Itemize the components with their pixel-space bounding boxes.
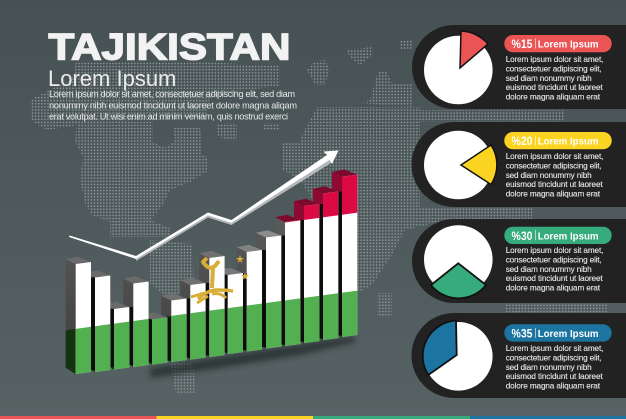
description text: euismod tincidunt ut laoreet (506, 180, 603, 189)
label pill: %15 (512, 39, 533, 51)
description text (506, 152, 603, 199)
description text: consectetuer adipiscing elit, (506, 255, 602, 264)
panel background (412, 25, 626, 109)
description text: dolore magna aliquam erat (506, 284, 601, 293)
panel: 20 percent (412, 122, 626, 207)
title: TAJIKISTAN (48, 26, 290, 68)
bottom colour strip (0, 416, 626, 419)
panel background (412, 219, 626, 303)
intro text block: nonummy nibh euismod tincidunt ut laoreet dolore magna aliqam (49, 100, 297, 110)
label pill: %30 (512, 231, 532, 243)
label pill: Lorem Ipsum (538, 40, 599, 51)
panel background (412, 313, 626, 398)
pie chart 30 percent (424, 225, 493, 298)
pie chart 35 percent (423, 320, 493, 391)
label pill (504, 324, 612, 342)
panel: 30 percent (412, 219, 626, 303)
label pill: Lorem Ipsum (538, 137, 599, 148)
description text (506, 246, 603, 293)
intro text block: Lorem ipsum dolor sit amet, consectetuer adipiscing elit, sed diam (49, 89, 295, 99)
subtitle: Lorem Ipsum (48, 66, 176, 91)
description text: consectetuer adipiscing elit, (506, 353, 602, 362)
panel background (412, 122, 626, 207)
description text: Lorem ipsum dolor sit amet, (506, 344, 603, 353)
label pill: Lorem Ipsum (538, 329, 599, 340)
description text: sed diam nonummy nibh (506, 363, 592, 372)
description text: sed diam nonummy nibh (506, 171, 592, 180)
label pill: %20 (512, 136, 532, 148)
panel: 15 percent (412, 25, 626, 109)
label pill (504, 227, 612, 244)
description text: euismod tincidunt ut laoreet (506, 372, 603, 381)
growth arrow (69, 150, 338, 261)
description text: Lorem ipsum dolor sit amet, (506, 152, 603, 161)
intro text block (49, 89, 297, 122)
description text: consectetuer adipiscing elit, (506, 64, 602, 73)
label pill (504, 132, 612, 149)
bar side faces (66, 172, 342, 374)
label pill: Lorem Ipsum (538, 231, 599, 242)
bar front faces with flag (76, 174, 358, 374)
bar top faces (66, 169, 357, 320)
pie chart 15 percent (424, 31, 493, 104)
label pill: %35 (512, 328, 533, 340)
description text: sed diam nonummy nibh (506, 74, 592, 83)
description text: euismod tincidunt ut laoreet (506, 274, 603, 283)
panel: 35 percent (412, 313, 626, 398)
dotted world map (30, 40, 608, 394)
description text: Lorem ipsum dolor sit amet, (506, 55, 603, 64)
description text: euismod tincidunt ut laoreet (506, 83, 603, 92)
description text (506, 55, 603, 102)
intro text block: erat volutpat. Ut wisi enim ad minim veniam, quis nostrud exerci (49, 112, 288, 122)
description text: dolore magna aliquam erat (506, 190, 601, 199)
label pill (504, 35, 612, 52)
description text (506, 344, 603, 391)
gap shadows between bars (91, 192, 342, 370)
pie chart 20 percent (424, 131, 497, 199)
flag emblem: crown and stars (191, 255, 249, 303)
description text: dolore magna aliquam erat (506, 93, 601, 102)
description text: consectetuer adipiscing elit, (506, 161, 602, 170)
description text: dolore magna aliquam erat (506, 382, 601, 391)
description text: sed diam nonummy nibh (506, 265, 592, 274)
description text: Lorem ipsum dolor sit amet, (506, 246, 603, 255)
3D bar chart in flag colours (60, 160, 360, 385)
ground shadow (150, 336, 355, 378)
